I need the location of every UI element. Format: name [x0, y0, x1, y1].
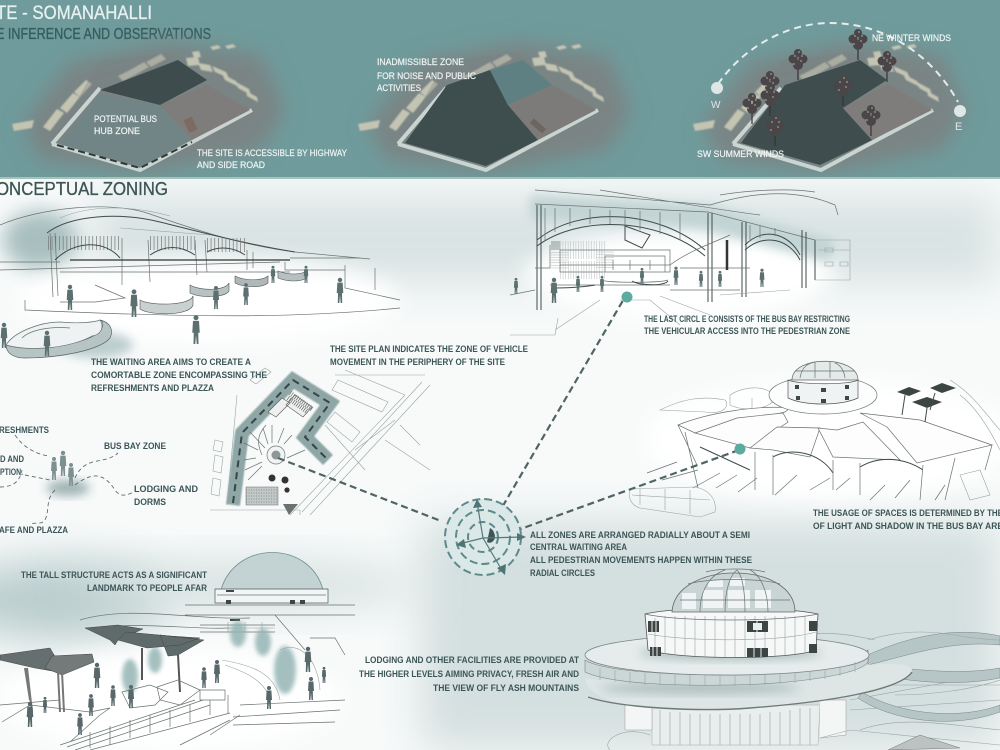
- text: site plan: [330, 344, 528, 368]
- sketch: plaza and landmark: [0, 552, 355, 750]
- text: waiting area: REFRESHMENTS AND PLAZZA: [91, 383, 214, 394]
- ring bands on the right: [858, 632, 1000, 721]
- site model 3: sun path and winds: NE WINTER WINDS: [872, 33, 951, 44]
- icon: sun path arc: [718, 23, 958, 102]
- sketch: bus bay perspective: [510, 190, 850, 335]
- site model 1: potential bus hub zone: POTENTIAL BUS: [94, 114, 157, 125]
- zone diagram: people with dashed links: PTION.: [0, 467, 23, 478]
- text: last circle: [644, 314, 850, 337]
- text: lodging: LODGING AND OTHER FACILITIES ARE PROVIDED AT: [365, 655, 579, 666]
- text: radial zones: ALL PEDESTRIAN MOVEMENTS HAPPEN WITHIN THESE: [530, 555, 752, 566]
- zone diagram: people with dashed links: BUS BAY ZONE: [104, 441, 166, 452]
- site model 3: sun path and winds: W: [711, 100, 721, 111]
- lower disk: [585, 664, 912, 710]
- upper disk: [585, 650, 868, 685]
- text: tall structure: THE TALL STRUCTURE ACTS AS A SIGNIFICANT: [21, 570, 207, 581]
- zone diagram: people with dashed links: [0, 425, 198, 536]
- site model 1: potential bus hub zone: [12, 42, 348, 172]
- text: tall structure: LANDMARK TO PEOPLE AFAR: [87, 583, 207, 594]
- sketch: bus bay roof aerial: [629, 361, 1000, 517]
- zone diagram: people with dashed links: AFE AND PLAZZA: [0, 525, 68, 536]
- text: last circle: THE VEHICULAR ACCESS INTO THE PEDESTRIAN ZONE: [644, 326, 850, 337]
- marker dot: bus bay perspective: [622, 292, 632, 302]
- text: lodging: THE VIEW OF FLY ASH MOUNTAINS: [433, 683, 579, 694]
- text: waiting area: [91, 357, 267, 394]
- site model 1: potential bus hub zone: AND SIDE ROAD: [197, 160, 265, 171]
- site plan: [210, 368, 430, 515]
- panel: site inference band: [0, 0, 1000, 179]
- site model 2: inadmissible zone: INADMISSIBLE ZONE: [377, 57, 464, 68]
- text: usage of spaces: [813, 508, 1000, 532]
- site model 2: inadmissible zone: [358, 42, 631, 172]
- text: lodging: [359, 655, 579, 694]
- text: radial zones: ALL ZONES ARE ARRANGED RADIALLY ABOUT A SEMI: [530, 530, 750, 541]
- sketch: landmark building closeup: [585, 569, 1000, 750]
- radial zoning diagram: [445, 499, 526, 575]
- site model 1: potential bus hub zone: THE SITE IS ACCESSIBLE BY HIGHWAY: [197, 148, 348, 159]
- subtitle: E INFERENCE AND OBSERVATIONS: [0, 26, 211, 43]
- curved bench: [6, 320, 112, 358]
- site model 2: inadmissible zone: ACTIVITIES: [377, 83, 421, 94]
- text: radial zones: [530, 530, 752, 579]
- zone diagram: people with dashed links: D AND: [0, 454, 24, 465]
- text: lodging: THE HIGHER LEVELS AIMING PRIVACY, FRESH AIR AND: [359, 669, 579, 680]
- text: site plan: MOVEMENT IN THE PERIPHERY OF THE SITE: [330, 357, 505, 368]
- dome: [672, 573, 795, 612]
- text: radial zones: CENTRAL WAITING AREA: [530, 542, 627, 553]
- zone diagram: people with dashed links: RESHMENTS: [0, 425, 49, 436]
- zone diagram: people with dashed links: LODGING AND: [134, 484, 198, 495]
- text: site plan: THE SITE PLAN INDICATES THE ZONE OF VEHICLE: [330, 344, 528, 355]
- marker dot: bus bay aerial: [734, 444, 746, 454]
- site model 1: potential bus hub zone: HUB ZONE: [94, 126, 140, 137]
- text: radial zones: RADIAL CIRCLES: [530, 568, 595, 579]
- title: TE - SOMANAHALLI: [0, 3, 152, 24]
- sketch: waiting area canopy: [0, 207, 400, 358]
- text: waiting area: COMORTABLE ZONE ENCOMPASSING THE: [91, 370, 267, 381]
- site model 3: sun path and winds: E: [955, 121, 962, 133]
- site model 2: inadmissible zone: FOR NOISE AND PUBLIC: [377, 71, 476, 82]
- text: last circle: THE LAST CIRCL E CONSISTS OF THE BUS BAY RESTRICTING: [644, 314, 850, 325]
- drum: [645, 608, 818, 658]
- text: tall structure: [21, 570, 207, 594]
- heading: conceptual zoning: ONCEPTUAL ZONING: [0, 179, 168, 199]
- soft teal wash behind the lower section: [0, 195, 1000, 750]
- connector lines: [278, 292, 746, 531]
- site model 3: sun path and winds: SW SUMMER WINDS: [697, 149, 784, 160]
- zone diagram: people with dashed links: DORMS: [134, 497, 166, 508]
- text: waiting area: THE WAITING AREA AIMS TO CREATE A: [91, 357, 251, 368]
- site model 3: sun path and winds: [693, 23, 966, 172]
